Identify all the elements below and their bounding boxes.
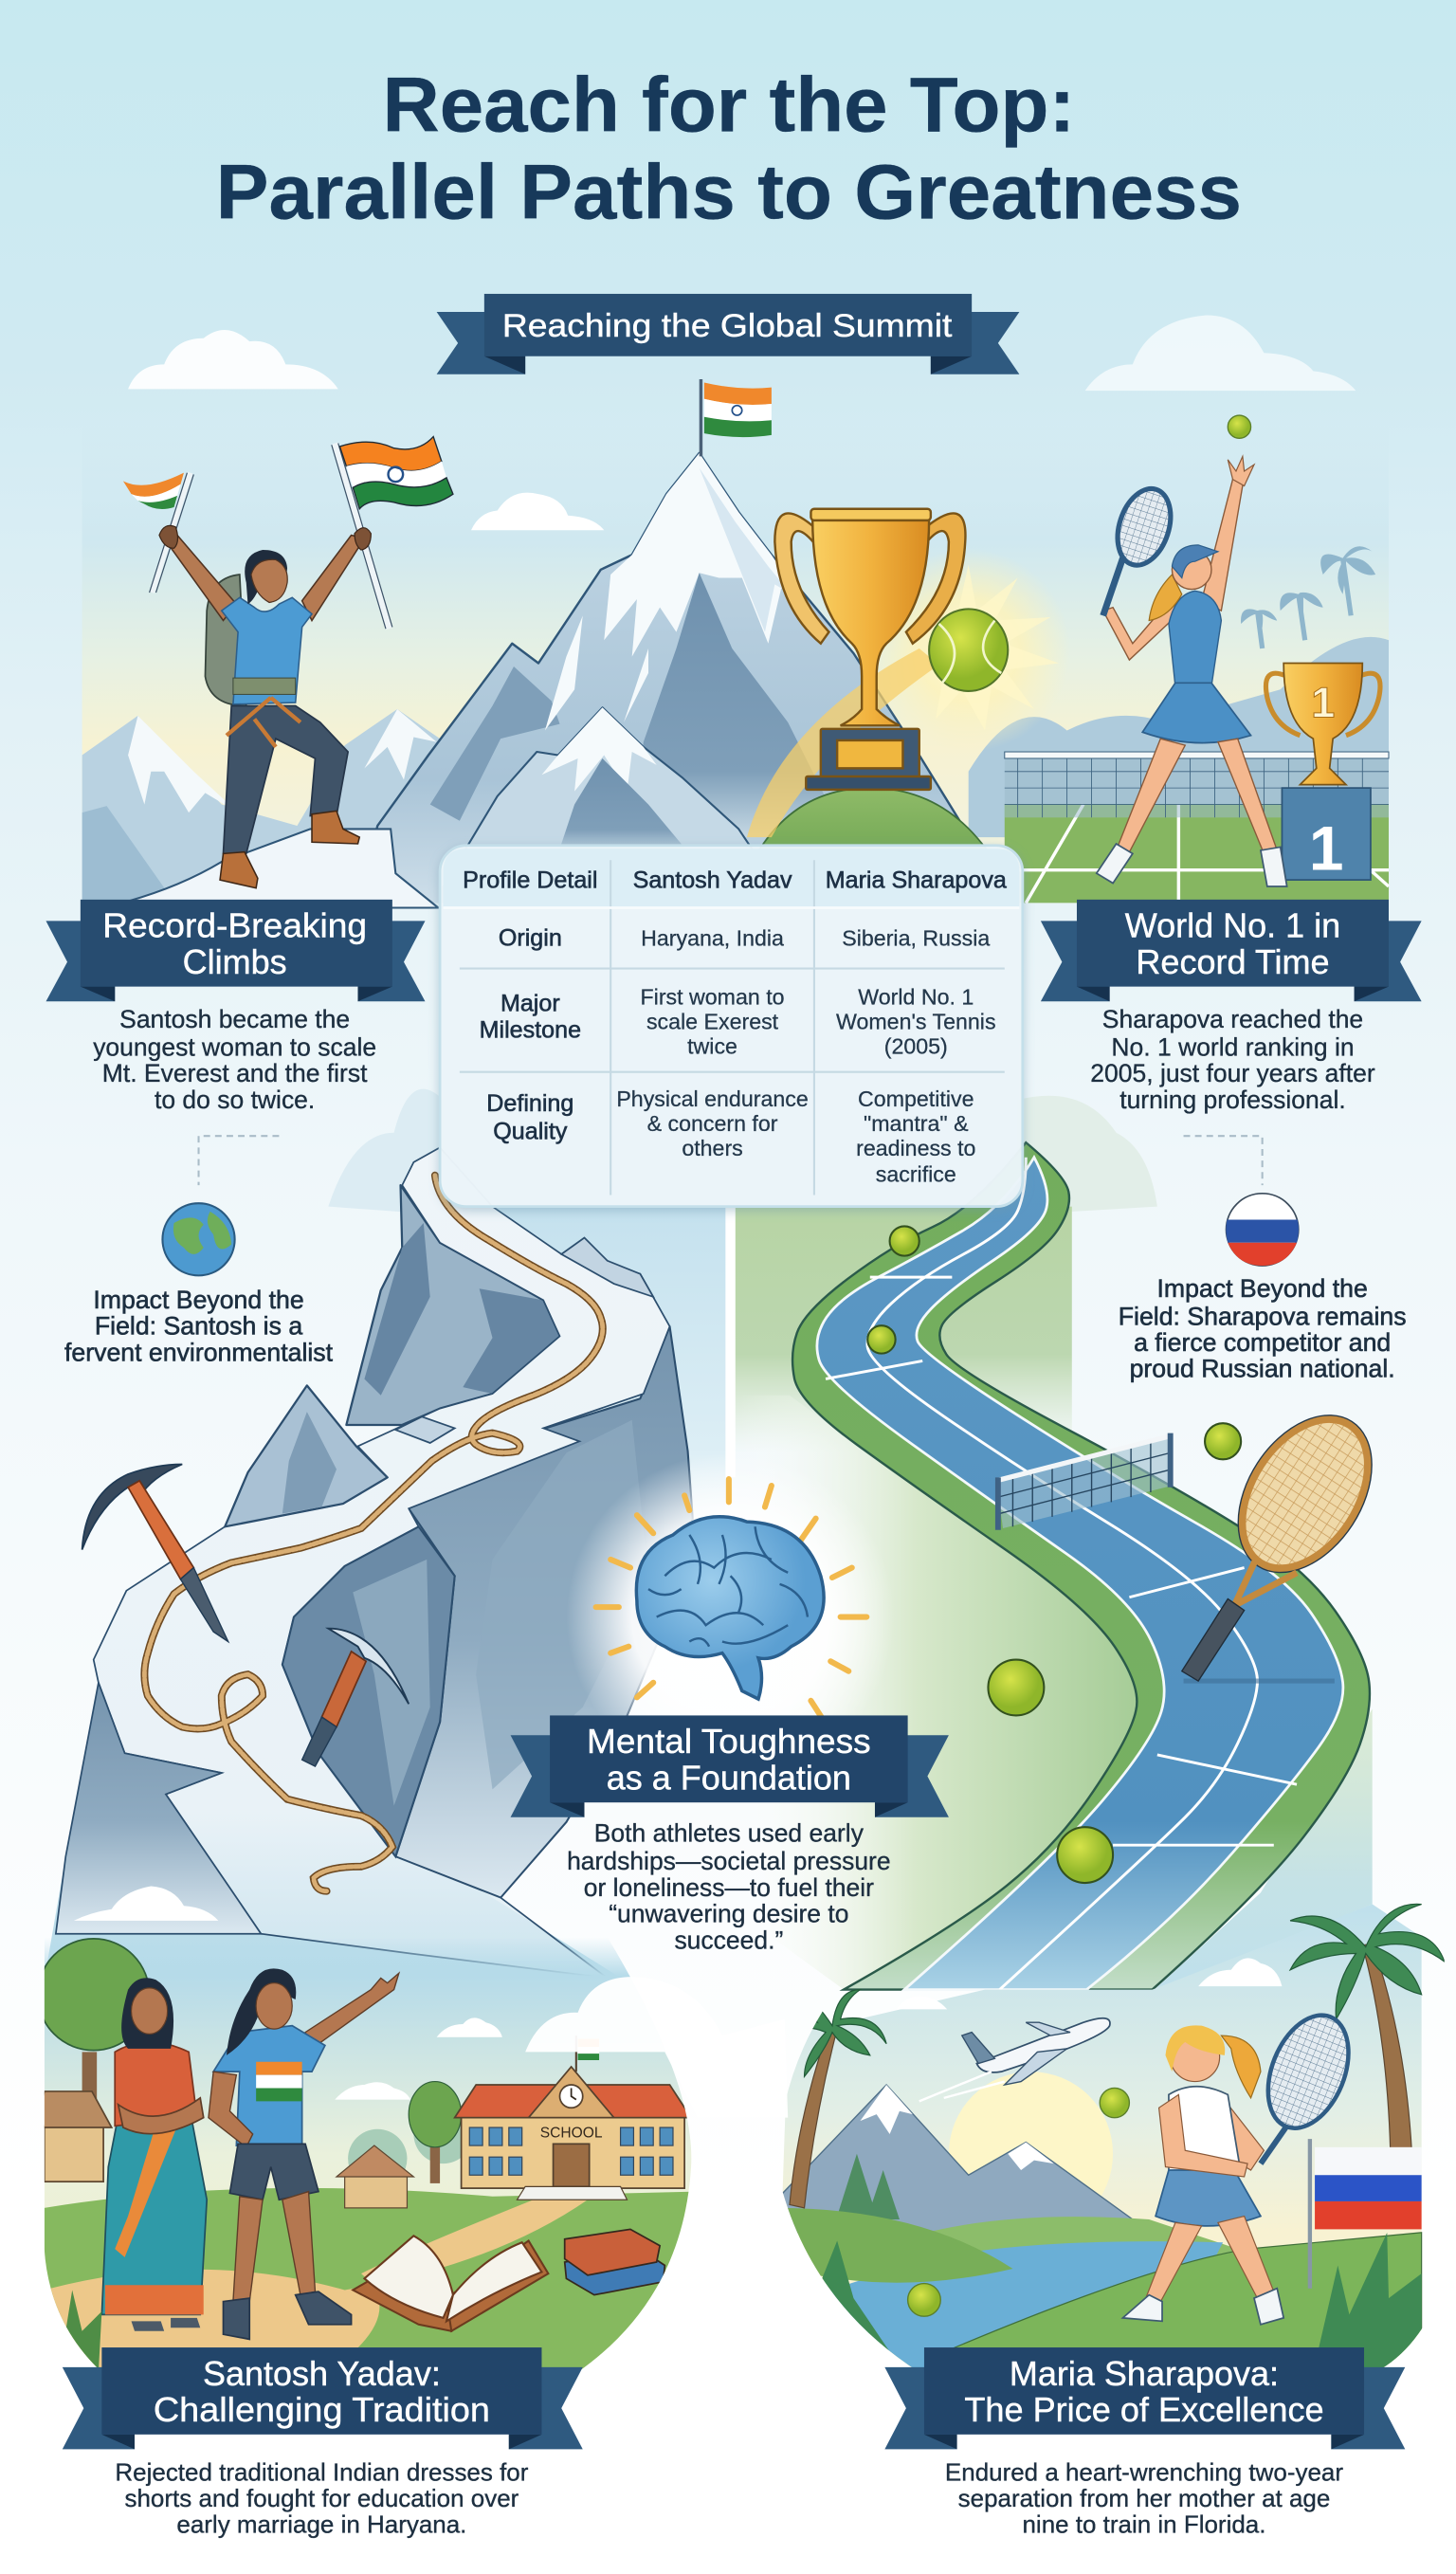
climber rock (128, 829, 438, 908)
road lane markings (826, 1158, 1297, 1990)
left palm (778, 1989, 886, 2208)
climber with flags (123, 437, 453, 888)
small trophy and podium: 1 (1311, 679, 1335, 727)
backpack (205, 575, 246, 706)
left flag (123, 473, 193, 593)
text: santosh yadav: shorts and fought for education over (125, 2484, 519, 2512)
scene sky (82, 419, 1389, 903)
rope (144, 1176, 603, 1891)
panel: comparison table (440, 846, 1023, 1207)
lower left rock (56, 1683, 261, 1934)
white centre divider (725, 1207, 736, 1477)
small cloud (471, 493, 604, 530)
row: major milestone: World No. 1 (858, 985, 974, 1010)
text: record-breaking climbs (93, 1005, 376, 1114)
russian flag on pole (1310, 2139, 1422, 2289)
flag on summit (701, 379, 772, 456)
distant trees right (837, 2154, 900, 2219)
small trophy and podium (1265, 664, 1380, 884)
banner: mental toughness: Mental Toughness (587, 1722, 871, 1761)
school: SCHOOL (540, 2125, 603, 2141)
text: record-breaking climbs: youngest woman to scale (93, 1032, 376, 1061)
row: origin: Haryana, India (641, 925, 784, 950)
text: record-breaking climbs: to do so twice. (155, 1086, 315, 1114)
ground (45, 2188, 698, 2372)
snow band and slope (94, 1147, 670, 1978)
podium hill (734, 788, 1018, 906)
title: Reach for the Top: (382, 63, 1075, 149)
banner: maria sharapova: The Price of Excellence (964, 2390, 1324, 2429)
text: world no. 1: Sharapova reached the (1102, 1005, 1363, 1033)
clouds: right sky (896, 1958, 1282, 2009)
row: origin: Origin (499, 924, 562, 951)
banner: record-breaking climbs (46, 900, 426, 1001)
text: maria sharapova: separation from her mother at age (958, 2484, 1330, 2512)
head (245, 550, 287, 604)
table header band (444, 849, 1019, 908)
text: santosh yadav (115, 2457, 529, 2539)
banner: record-breaking climbs: Record-Breaking (102, 906, 367, 945)
impact: sharapova (1119, 1136, 1407, 1383)
small rocks (395, 1238, 653, 1443)
open book (353, 2236, 548, 2331)
girl pointing (209, 1968, 399, 2339)
icon: russia flag circle (1226, 1194, 1299, 1266)
impact: santosh: Impact Beyond the (93, 1286, 304, 1314)
panel: mountain route illustration (45, 1147, 693, 1980)
harness (233, 678, 296, 694)
sun glow behind ball (866, 548, 1070, 752)
green bank (776, 2208, 1012, 2283)
row: major milestone (480, 985, 996, 1059)
foreground foliage (790, 2233, 1422, 2372)
text: mental toughness: succeed.” (674, 1926, 783, 1954)
clouds: upper sky (128, 315, 1356, 391)
banner: maria sharapova (884, 2347, 1405, 2449)
distant mountains left (82, 453, 1389, 920)
text: santosh yadav: Rejected traditional Indian dresses for (115, 2457, 529, 2486)
impact: santosh (64, 1136, 334, 1366)
row: defining quality: & concern for (647, 1111, 778, 1136)
row: defining quality: Quality (493, 1119, 568, 1145)
mountain snow cap (604, 453, 781, 656)
row: defining quality: Defining (486, 1090, 573, 1117)
text: world no. 1: turning professional. (1119, 1086, 1346, 1114)
tennis player (1097, 415, 1287, 886)
small sky clouds (335, 2017, 502, 2100)
tree (44, 1938, 148, 2099)
impact: sharapova: Field: Sharapova remains (1119, 1302, 1407, 1330)
impact: santosh: fervent environmentalist (64, 1338, 334, 1366)
banner: santosh yadav: Challenging Tradition (154, 2390, 490, 2429)
row: defining quality: others (682, 1136, 743, 1160)
arms (164, 535, 364, 621)
far bank (883, 2217, 1422, 2372)
text: mental toughness: Both athletes used early (594, 1819, 864, 1848)
header row (463, 867, 1007, 894)
small peak (225, 1385, 388, 1526)
banner: reaching the global summit (437, 294, 1019, 374)
cloud: mid left (74, 1886, 218, 1921)
row: origin (499, 924, 990, 951)
second peak (467, 706, 751, 844)
impact: sharapova: Impact Beyond the (1157, 1274, 1368, 1303)
text: mental toughness: or loneliness—to fuel their (584, 1873, 874, 1902)
far blue hills right (969, 637, 1389, 837)
row: major milestone: twice (687, 1034, 737, 1059)
icon: brain with rays (596, 1479, 866, 1724)
banner: world no. 1: World No. 1 in (1125, 906, 1340, 945)
row: defining quality: Competitive (858, 1086, 974, 1111)
row: defining quality: readiness to (856, 1136, 975, 1160)
palm silhouettes (1257, 558, 1351, 648)
text: mental toughness (567, 1819, 891, 1954)
tennis court (1005, 752, 1389, 903)
row: defining quality: sacrifice (876, 1162, 956, 1187)
row: major milestone: Milestone (480, 1016, 581, 1043)
icon: globe (162, 1203, 235, 1275)
near hill (936, 2233, 1422, 2372)
glow behind brain (566, 1452, 895, 1781)
text: record-breaking climbs: Santosh became the (119, 1005, 350, 1033)
legs (224, 706, 348, 853)
tennis ball (929, 565, 1059, 731)
text: world no. 1 (1090, 1005, 1375, 1114)
hands (159, 525, 371, 550)
row: defining quality: Physical endurance (616, 1086, 809, 1111)
road surface (817, 1158, 1343, 1990)
panel: bottom left scene (36, 1937, 701, 2372)
impact: sharapova: proud Russian national. (1130, 1355, 1395, 1383)
banner: mental toughness: as a Foundation (607, 1758, 851, 1797)
right palm (1290, 1904, 1445, 2150)
hut (36, 2091, 112, 2182)
banner: santosh yadav: Santosh Yadav: (203, 2354, 441, 2393)
text: santosh yadav: early marriage in Haryana. (176, 2510, 466, 2539)
lower rock shading (476, 1420, 648, 1789)
text: world no. 1: 2005, just four years after (1090, 1059, 1375, 1087)
row: major milestone: Major (500, 991, 560, 1017)
banner: mental toughness (511, 1715, 949, 1817)
boots (220, 811, 359, 888)
cloud: centre foreground (525, 1977, 788, 2118)
golden sweep (747, 648, 939, 837)
upper cliff (346, 1185, 560, 1425)
header row: Santosh Yadav (633, 867, 792, 894)
cave rock (282, 1526, 455, 1856)
school (455, 2035, 691, 2200)
small trophy and podium: 1 (1309, 813, 1343, 884)
panel: tennis road illustration (792, 1142, 1399, 1990)
stacked books (565, 2229, 664, 2295)
sun (949, 2072, 1113, 2196)
row: defining quality (486, 1086, 975, 1187)
banner: world no. 1: Record Time (1136, 942, 1330, 981)
road green verge (792, 1142, 1370, 1990)
path (45, 2197, 588, 2372)
distant trees (348, 2125, 461, 2169)
row: major milestone: scale Exerest (646, 1010, 779, 1034)
road tennis balls (867, 1226, 1241, 1883)
row: origin: Siberia, Russia (842, 925, 990, 950)
text: mental toughness: “unwavering desire to (609, 1900, 848, 1928)
banner: santosh yadav (63, 2347, 583, 2449)
ice axe upper (82, 1465, 228, 1642)
banner: reaching the global summit: Reaching the Global Summit (502, 308, 953, 344)
tint panels behind routes (476, 1207, 1373, 1995)
title (216, 63, 1242, 235)
floating tennis balls (908, 2088, 1129, 2316)
large trophy (774, 509, 965, 790)
girl with racket (1122, 2003, 1364, 2325)
text: maria sharapova: Endured a heart-wrenching two-year (945, 2457, 1343, 2486)
header row: Profile Detail (463, 867, 597, 894)
lake (805, 2241, 1223, 2372)
sky behind lower mountain (45, 1683, 624, 1980)
mountains (776, 2085, 1133, 2233)
tree right (409, 2082, 462, 2183)
pale hills behind text (328, 1089, 1157, 1214)
banner: world no. 1 (1041, 900, 1422, 1001)
small house (337, 2145, 413, 2208)
text: maria sharapova (945, 2457, 1343, 2539)
row: major milestone: First woman to (641, 985, 785, 1010)
shirt (222, 597, 312, 704)
row: major milestone: (2005) (884, 1034, 948, 1059)
impact: sharapova: a fierce competitor and (1134, 1328, 1391, 1357)
text: world no. 1: No. 1 world ranking in (1111, 1032, 1355, 1061)
tennis net (996, 1433, 1172, 1530)
foreground plants (66, 2291, 102, 2367)
mountain facets (643, 573, 824, 837)
central mountain (375, 451, 961, 903)
panel: global summit scene (82, 379, 1389, 920)
airplane (919, 2018, 1110, 2101)
banner: record-breaking climbs: Climbs (183, 942, 287, 981)
text: maria sharapova: nine to train in Florida. (1023, 2510, 1265, 2539)
large racket (1182, 1391, 1399, 1681)
row: defining quality: "mantra" & (864, 1111, 969, 1136)
panel: bottom right scene (776, 1904, 1445, 2372)
title: Parallel Paths to Greatness (216, 149, 1242, 235)
table grid (460, 860, 1005, 1196)
text: record-breaking climbs: Mt. Everest and the first (102, 1059, 368, 1087)
banner: maria sharapova: Maria Sharapova: (1010, 2354, 1279, 2393)
row: major milestone: Women's Tennis (836, 1010, 996, 1034)
right flag (332, 437, 453, 629)
lower right rock (395, 1326, 693, 1898)
woman in sari (101, 1978, 207, 2331)
impact: santosh: Field: Santosh is a (95, 1312, 302, 1341)
header row: Maria Sharapova (826, 867, 1007, 894)
ice axe lower (302, 1629, 409, 1766)
text: mental toughness: hardships—societal pressure (567, 1847, 891, 1875)
